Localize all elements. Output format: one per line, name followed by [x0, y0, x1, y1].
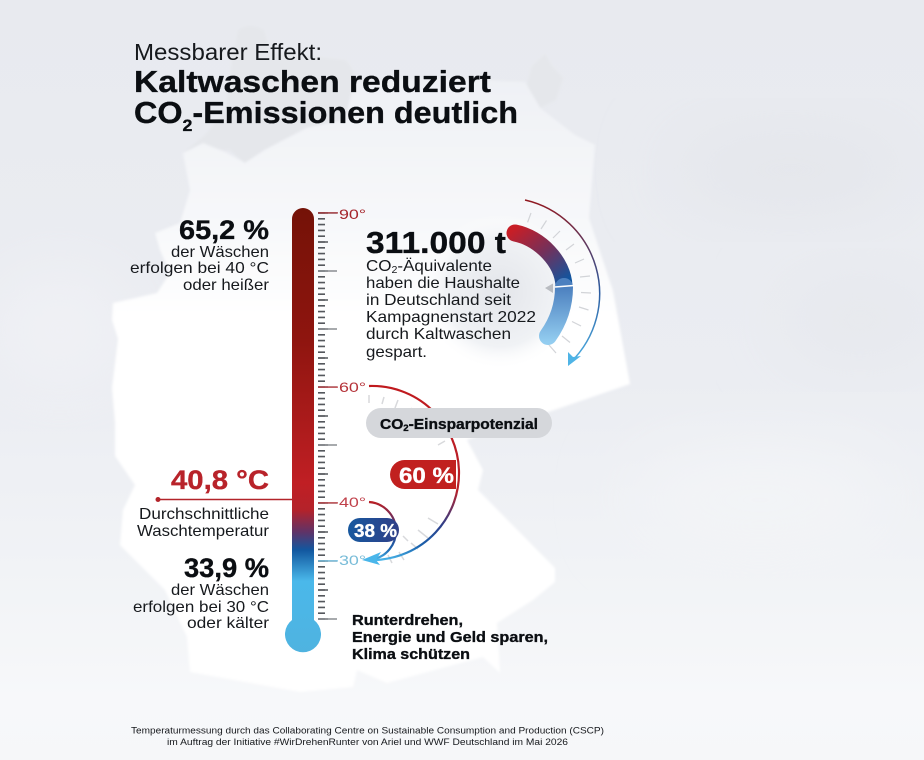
thermometer scale: 30° — [339, 552, 366, 568]
stat: 65,2 %: der Wäschen — [171, 244, 269, 261]
footnote: Temperaturmessung durch das Collaborating Centre on Sustainable Consumption and Production (CSCP) — [131, 726, 604, 736]
pill: CO2 savings potential: 2 — [403, 423, 409, 433]
slogan — [352, 612, 548, 663]
thermometer scale: 60° — [339, 379, 366, 395]
title — [134, 39, 518, 135]
savings arcs — [362, 386, 459, 565]
pill: 60 %: 60 % — [399, 463, 454, 488]
average temperature callout: 40,8 °C — [171, 465, 269, 495]
stat: 33,9 %: der Wäschen — [171, 582, 269, 599]
stat: 33,9 %: 33,9 % — [184, 553, 269, 583]
stat: 33,9 % — [133, 553, 270, 632]
text: 311.000 t savings: in Deutschland seit — [366, 292, 512, 309]
text: 311.000 t savings: durch Kaltwaschen — [366, 326, 511, 343]
pill: 38 % — [348, 518, 399, 542]
thermometer scale: 40° — [339, 494, 366, 510]
stat: 65,2 % — [130, 215, 270, 294]
title: CO — [134, 95, 180, 130]
average temperature callout — [137, 465, 292, 540]
thermometer — [285, 208, 321, 652]
slogan: Runterdrehen, — [352, 612, 463, 629]
title: Kaltwaschen reduziert — [134, 64, 491, 99]
radial gauge: 311.000 t — [422, 200, 600, 370]
pill: CO2 savings potential: -Einsparpotenzial — [409, 417, 538, 433]
pill: CO2 savings potential — [366, 408, 552, 438]
stat: 65,2 %: oder heißer — [183, 277, 270, 294]
text: 311.000 t savings: CO — [366, 258, 390, 275]
stat: 65,2 %: erfolgen bei 40 °C — [130, 260, 269, 277]
thermometer scale: 90° — [339, 206, 366, 222]
slogan: Klima schützen — [352, 646, 470, 663]
text: 311.000 t savings: gespart. — [366, 344, 427, 361]
text: 311.000 t savings: haben die Haushalte — [366, 275, 520, 292]
thermometer scale — [318, 206, 366, 620]
average temperature callout: Durchschnittliche — [139, 506, 269, 523]
pill: 60 % — [390, 460, 456, 489]
stat: 33,9 %: oder kälter — [187, 615, 270, 632]
map: northern islands — [183, 26, 563, 164]
footnote: im Auftrag der Initiative #WirDrehenRunter von Ariel und WWF Deutschland im Mai 2026 — [167, 737, 568, 747]
text: 311.000 t savings: 311.000 t — [366, 225, 506, 260]
footnote — [131, 726, 604, 747]
text: 311.000 t savings — [366, 225, 536, 361]
stat: 65,2 %: 65,2 % — [179, 215, 269, 245]
text: 311.000 t savings: 2 — [392, 265, 398, 276]
pill: CO2 savings potential: CO — [380, 417, 402, 433]
average temperature callout: Waschtemperatur — [137, 523, 270, 540]
title: -Emissionen deutlich — [192, 95, 518, 130]
text: 311.000 t savings: -Äquivalente — [397, 257, 492, 275]
title: Messbarer Effekt: — [134, 39, 322, 65]
stat: 33,9 %: erfolgen bei 30 °C — [133, 599, 269, 616]
pill: 38 %: 38 % — [354, 521, 397, 541]
map of Germany — [112, 78, 630, 692]
title: 2 — [183, 116, 192, 135]
text: 311.000 t savings: Kampagnenstart 2022 — [366, 309, 536, 326]
slogan: Energie und Geld sparen, — [352, 629, 548, 646]
